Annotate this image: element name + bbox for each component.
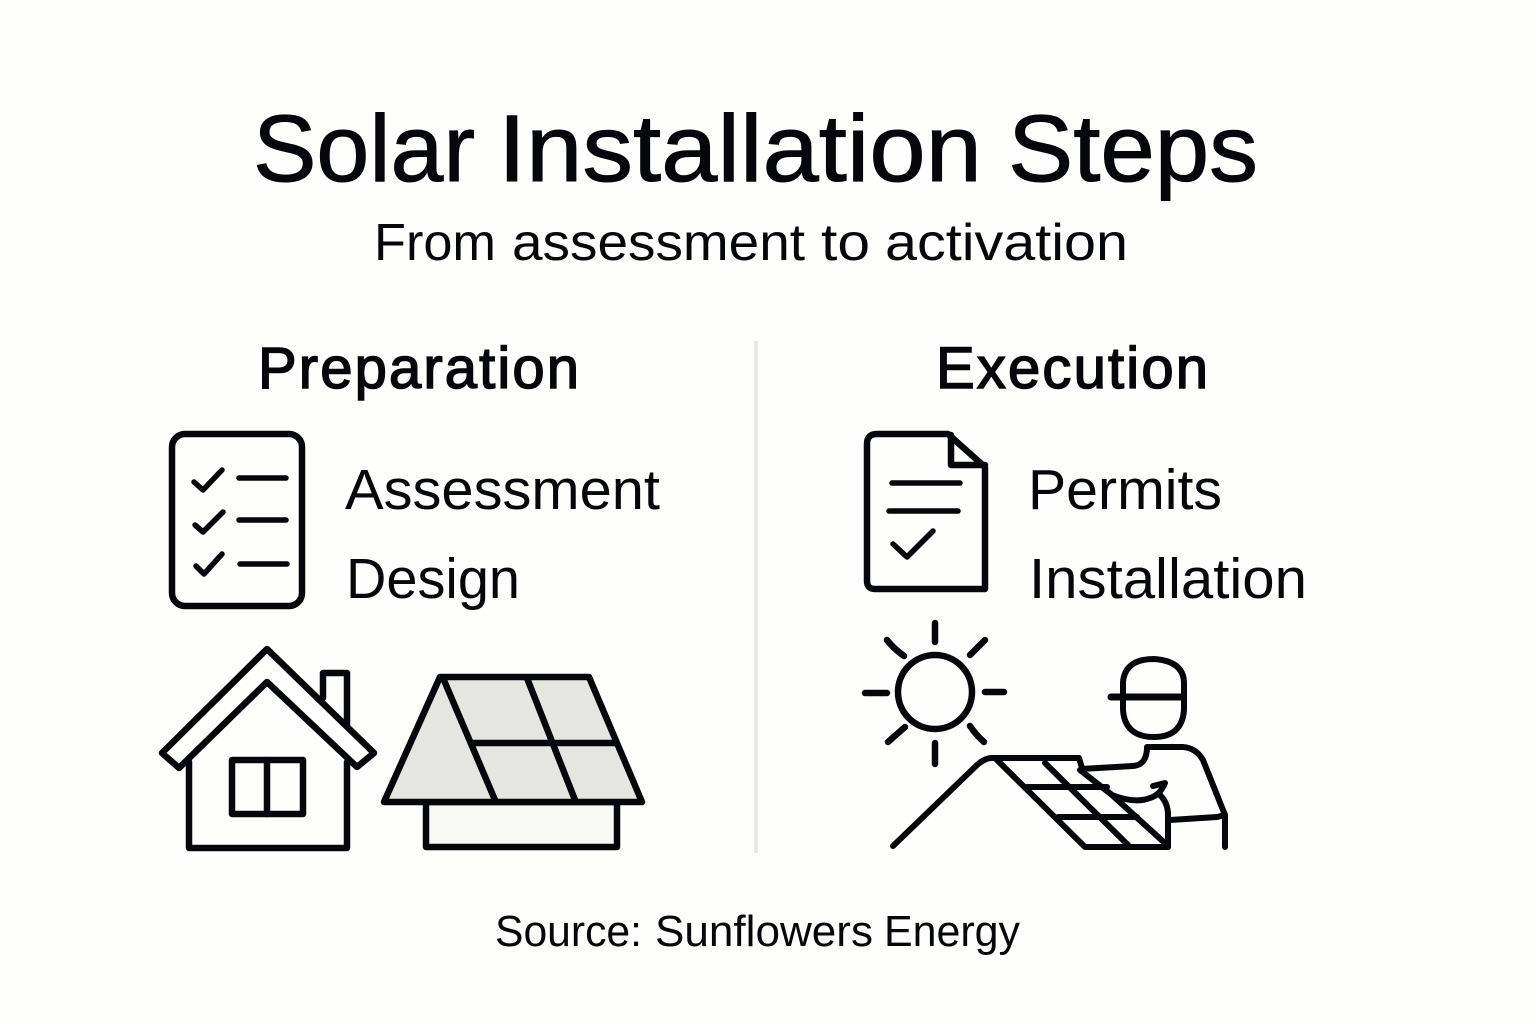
icon: sun	[865, 623, 1004, 764]
source: Energy	[884, 907, 1020, 956]
subtitle: assessment	[512, 214, 806, 272]
title: Steps	[1008, 96, 1258, 202]
text: installation: Installation	[1029, 547, 1307, 611]
heading: execution: Execution	[936, 336, 1208, 401]
icon: checklist	[172, 434, 302, 606]
title	[253, 96, 1258, 202]
source: Sunflowers	[655, 907, 873, 956]
title: Installation	[498, 96, 982, 202]
icon: document with check	[867, 434, 985, 589]
panel: preparation	[162, 336, 660, 848]
icon: roof with solar panels	[384, 677, 642, 847]
text: assessment: Assessment	[345, 458, 660, 522]
source	[495, 907, 1020, 956]
title: Solar	[253, 96, 475, 202]
text: design: Design	[346, 547, 520, 611]
subtitle: to	[821, 214, 870, 272]
source: Source:	[495, 907, 642, 956]
subtitle: From	[374, 214, 496, 272]
icon: worker installing roof panels	[893, 659, 1225, 847]
icon: house	[162, 649, 374, 848]
heading: preparation: Preparation	[258, 336, 579, 401]
subtitle: activation	[885, 214, 1128, 272]
text: permits: Permits	[1028, 458, 1222, 522]
subtitle	[374, 214, 1128, 272]
panel: execution	[865, 336, 1307, 847]
